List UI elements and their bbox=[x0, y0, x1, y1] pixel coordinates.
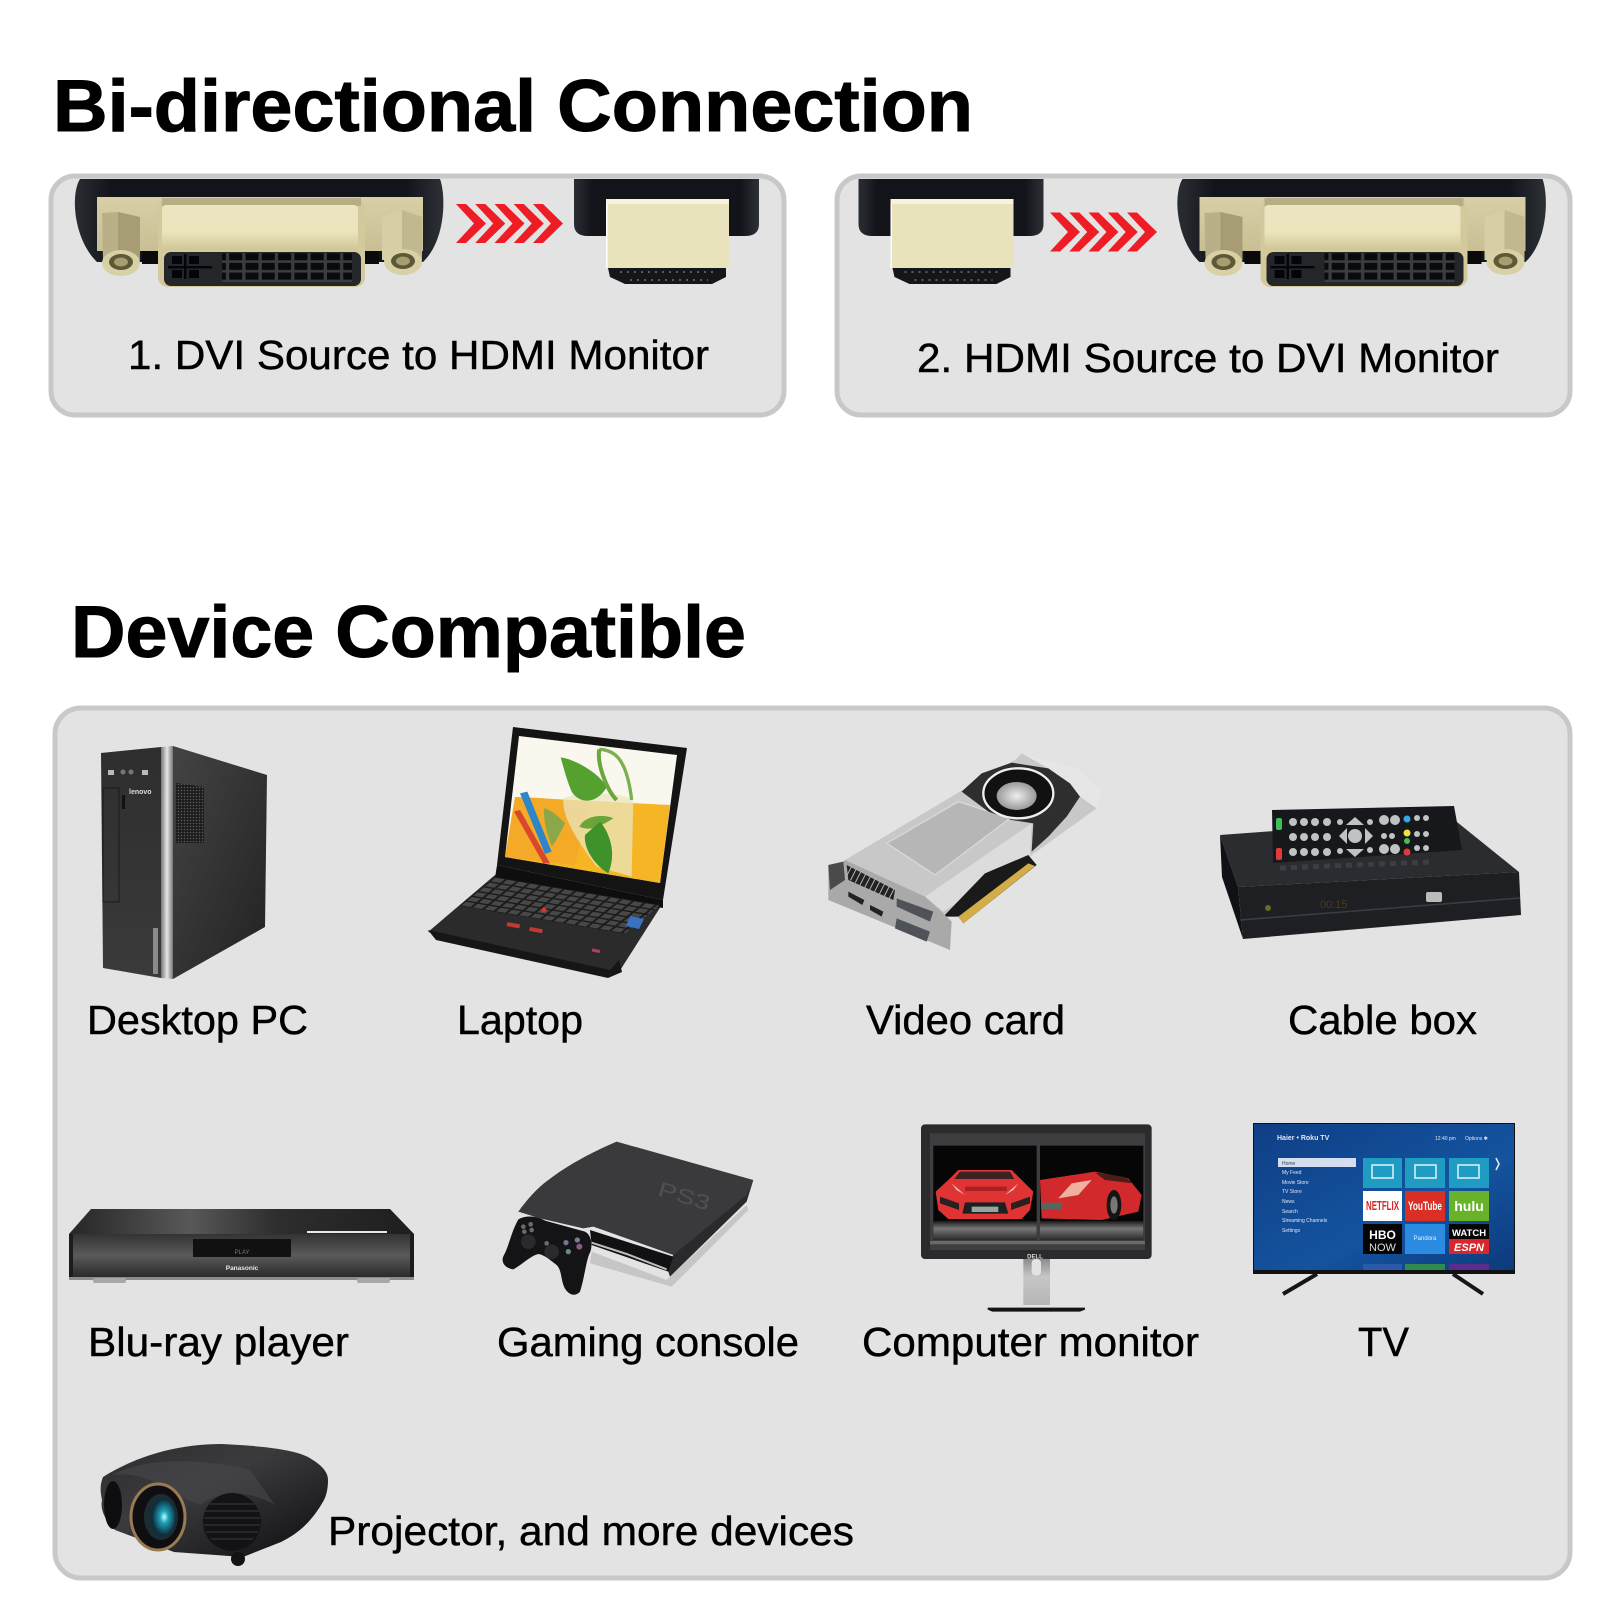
icon: TV: News bbox=[1282, 1199, 1295, 1205]
label: Projector, and more devices: Projector, and more devices bbox=[328, 1508, 854, 1554]
icon: projector bbox=[101, 1444, 328, 1566]
icon: TV: My Feed bbox=[1282, 1170, 1302, 1176]
icon: TV: Settings bbox=[1282, 1228, 1301, 1234]
icon: HDMI connector bbox=[574, 179, 759, 284]
sub-element: app tiles: NOW bbox=[1369, 1242, 1397, 1254]
icon: gaming console bbox=[503, 1142, 753, 1295]
icon: cable box with remote bbox=[1220, 806, 1521, 939]
label: Cable box: Cable box bbox=[1288, 997, 1478, 1043]
icon: TV bbox=[1253, 1123, 1515, 1294]
icon: Blu-ray player bbox=[69, 1209, 414, 1283]
label: Computer monitor: Computer monitor bbox=[862, 1319, 1199, 1365]
sub-element: keyboard bbox=[459, 877, 660, 934]
icon: desktop PC: lenovo bbox=[129, 789, 152, 796]
icon: cable box with remote: 00:15 bbox=[1320, 899, 1348, 911]
icon: TV: Search bbox=[1282, 1209, 1298, 1215]
icon: TV: Options ✱ bbox=[1465, 1136, 1488, 1142]
sub-element: PS3 logo: PS3 bbox=[655, 1178, 713, 1215]
sub-element: app tiles: WATCH bbox=[1452, 1228, 1486, 1239]
sub-element: app tiles: YouTube bbox=[1408, 1199, 1442, 1213]
arrow: red chevrons bbox=[1050, 212, 1157, 252]
icon: DVI connector bbox=[75, 179, 443, 287]
sub-element: red car front bbox=[936, 1170, 1033, 1219]
icon: TV: Streaming Channels bbox=[1282, 1218, 1328, 1224]
icon: TV: Home bbox=[1282, 1161, 1296, 1167]
panel: HDMI source to DVI monitor bbox=[837, 176, 1570, 415]
label: Gaming console: Gaming console bbox=[497, 1319, 799, 1365]
label: Desktop PC: Desktop PC bbox=[87, 997, 308, 1043]
icon: computer monitor: DELL bbox=[1027, 1255, 1043, 1261]
icon: Blu-ray player: PLAY bbox=[235, 1250, 249, 1256]
icon: HDMI connector bbox=[858, 179, 1044, 284]
sub-element: game controller bbox=[503, 1217, 591, 1295]
label: TV: TV bbox=[1358, 1319, 1410, 1365]
sub-element: app tiles: Pandora bbox=[1414, 1236, 1437, 1242]
sub-element: red car side bbox=[1040, 1172, 1142, 1220]
panel: DVI source to HDMI monitor bbox=[51, 176, 784, 415]
label: Blu-ray player: Blu-ray player bbox=[88, 1319, 349, 1365]
icon: video card bbox=[828, 753, 1102, 950]
label: Laptop: Laptop bbox=[457, 997, 583, 1043]
label: HDMI source to DVI monitor: 2. HDMI Source to DVI Monitor bbox=[917, 335, 1499, 381]
icon: TV: Haier • Roku TV bbox=[1277, 1135, 1330, 1142]
icon: TV: TV Store bbox=[1282, 1189, 1302, 1195]
icon: computer monitor bbox=[921, 1124, 1152, 1312]
icon: Blu-ray player: Panasonic bbox=[226, 1265, 259, 1272]
sub-element: remote control bbox=[1272, 806, 1462, 863]
arrow: red chevrons bbox=[456, 204, 563, 243]
sub-element: app tiles: NETFLIX bbox=[1366, 1198, 1399, 1213]
sub-element: app tiles bbox=[1363, 1158, 1489, 1270]
sub-element: app tiles: hulu bbox=[1454, 1198, 1484, 1214]
label: Video card: Video card bbox=[866, 997, 1065, 1043]
icon: desktop PC bbox=[101, 746, 267, 979]
icon: TV: 12:40 pm bbox=[1435, 1136, 1456, 1142]
panel: compatible devices bbox=[55, 708, 1570, 1578]
icon: laptop bbox=[428, 727, 687, 978]
label: DVI source to HDMI monitor: 1. DVI Source to HDMI Monitor bbox=[128, 332, 709, 378]
title: Bi-directional Connection: Bi-directional Connection bbox=[53, 66, 973, 147]
sub-element: app tiles: HBO bbox=[1369, 1228, 1396, 1242]
icon: DVI connector bbox=[1177, 179, 1546, 287]
title: Device Compatible: Device Compatible bbox=[71, 592, 746, 673]
icon: TV: Movie Store bbox=[1282, 1180, 1309, 1186]
sub-element: app tiles: ESPN bbox=[1454, 1242, 1485, 1254]
